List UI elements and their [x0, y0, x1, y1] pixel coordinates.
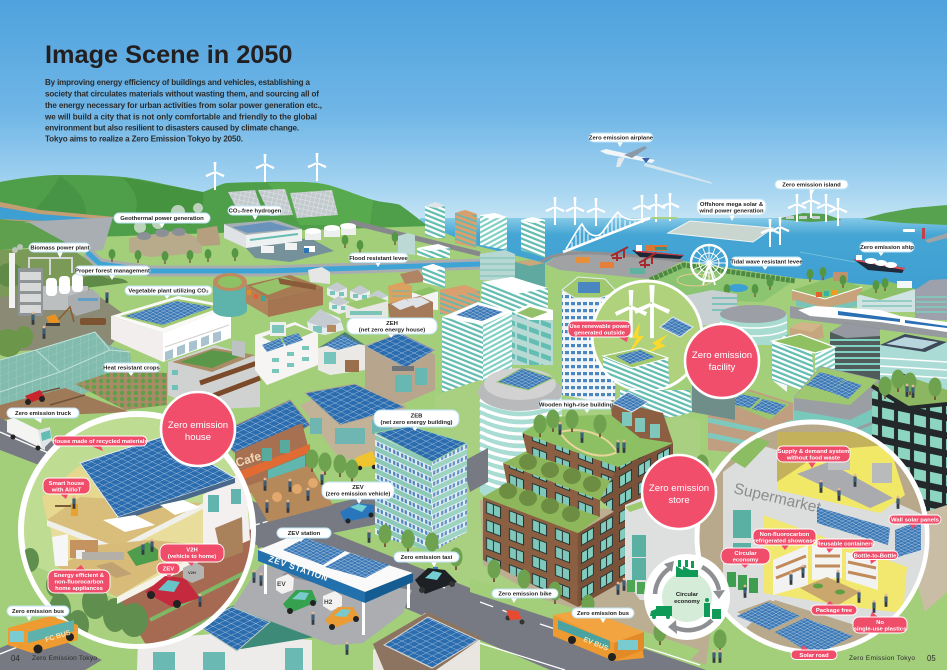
orange car — [325, 607, 360, 630]
label: V2H: (vehicle to home) — [168, 554, 216, 560]
dam and lake — [0, 202, 115, 252]
recycling truck icon — [650, 606, 672, 619]
label: Vegetable plant utilizing CO2: Vegetable plant utilizing CO₂ — [128, 288, 209, 294]
desk and person — [55, 505, 72, 507]
cafe: Cafe — [234, 449, 263, 470]
distant tall buildings — [398, 202, 548, 318]
footer right: Zero Emission Tokyo — [849, 655, 915, 662]
street trees near wooden building — [488, 454, 726, 652]
label: Supply and demand system — [777, 446, 850, 468]
label: Zero emission bike: Zero emission bike — [498, 592, 552, 598]
intro text — [44, 78, 322, 144]
zero emission bike — [506, 610, 524, 624]
label: Energy efficient appliances: non-fluorocarbon — [54, 580, 104, 586]
teal mid building centre right — [692, 370, 735, 420]
label: Solar road: Solar road — [799, 653, 829, 659]
facility building — [602, 348, 670, 390]
label: Offshore mega solar: wind power generation — [698, 208, 764, 214]
offshore island — [777, 213, 842, 222]
label: No single-use plastics: No — [876, 620, 884, 626]
badge: zero emission store: Zero emission — [649, 483, 709, 494]
label: Heat resistant crops: Heat resistant crops — [103, 366, 161, 372]
label: Zero emission ship — [860, 242, 914, 256]
label: Use renewable power generated outside — [568, 321, 631, 342]
land base — [0, 226, 947, 670]
shop shelves — [773, 545, 878, 595]
zero emission truck — [7, 418, 52, 450]
low-rise apartment with rooftop garden — [168, 322, 318, 410]
tan low solar building — [708, 388, 793, 458]
zero emission tall teal building — [442, 302, 512, 412]
label: Bottle-to-Bottle: Bottle-to-Bottle — [854, 554, 897, 560]
forest on left slope — [0, 248, 135, 297]
title: Image Scene in 2050 — [45, 41, 292, 69]
road markings — [0, 432, 700, 670]
ZEB net zero energy building — [375, 426, 467, 552]
label: Flood resistant levee — [349, 253, 409, 267]
label: Smart house with AI/IoT: with AI/IoT — [51, 488, 82, 494]
badge: zero emission house: house — [185, 432, 211, 443]
suspension bridge — [563, 212, 650, 252]
label: Energy efficient appliances: Energy efficient & — [54, 573, 105, 579]
house structure — [203, 475, 250, 544]
label: Use renewable power generated outside: generated outside — [574, 330, 626, 336]
label: CO2-free hydrogen — [228, 206, 282, 220]
label: V2H — [160, 544, 224, 566]
house trees — [21, 548, 148, 640]
label: ZEV red — [157, 563, 180, 578]
V2H charger: V2H — [188, 570, 196, 575]
label: ZEB: (net zero energy building) — [380, 420, 453, 426]
badge: zero emission facility — [685, 324, 759, 398]
label: Heat resistant crops — [103, 363, 161, 376]
greenhouses — [0, 332, 132, 410]
label: Offshore mega solar — [697, 199, 766, 221]
beds — [103, 515, 155, 532]
badge: zero emission facility: Zero emission — [692, 350, 752, 361]
wooden high-rise building — [483, 392, 673, 607]
hexagonal white tower — [562, 277, 617, 400]
label: ZEH — [347, 318, 437, 338]
elevated train line — [790, 306, 947, 338]
facility turbines — [615, 290, 647, 338]
people near station — [252, 570, 349, 655]
sea wind turbines — [546, 190, 848, 226]
label: CO2-free hydrogen: CO₂-free hydrogen — [229, 208, 282, 214]
cafe terrace — [247, 465, 333, 522]
EV charger box: EV — [277, 581, 286, 588]
label: Supply and demand system: without food waste — [786, 456, 841, 462]
waterfront low buildings — [792, 267, 947, 320]
label: Package free — [811, 601, 857, 615]
round solar-roof building — [478, 368, 562, 504]
white green-roof tower — [772, 334, 835, 397]
label: Non-fluorocarbon refrigerated showcase — [753, 529, 816, 550]
shoppers — [789, 565, 888, 613]
factory icon — [676, 560, 698, 577]
trees around ZEB — [306, 450, 462, 570]
label: Zero emission truck — [7, 408, 79, 423]
airplane with contrail — [600, 146, 712, 184]
biomass power plant — [9, 244, 100, 316]
yellow car behind ZEB — [355, 451, 378, 470]
intro text: environment but also resilient to disasters caused by climate change. — [45, 124, 299, 132]
container ship and cranes — [575, 245, 684, 274]
red zero emission car — [145, 576, 200, 608]
facility inset background — [592, 281, 702, 400]
roof solar panels — [80, 436, 235, 517]
label: Reusable containers — [816, 539, 875, 553]
label: Biomass power plant — [29, 243, 90, 258]
label: Tidal wave resistant levee: Tidal wave resistant levee — [730, 260, 803, 266]
offshore mega solar — [668, 217, 790, 247]
label: Wall solar panels — [889, 515, 941, 529]
H2 box — [323, 591, 342, 611]
dining table — [96, 562, 132, 578]
label: Vegetable plant utilizing CO2 — [125, 286, 212, 299]
badge: zero emission store: store — [668, 495, 690, 506]
bottom centre house — [373, 612, 482, 670]
white store side building — [625, 495, 700, 600]
label: Wooden high-rise building — [539, 400, 613, 413]
label: House made of recycled materials: House made of recycled materials — [52, 439, 148, 445]
H2 box: H2 — [324, 599, 333, 606]
zero emission store inset — [697, 422, 935, 656]
intro text: Tokyo aims to realize a Zero Emission Tokyo by 2050. — [45, 134, 243, 144]
label: ZEB: ZEB — [411, 414, 422, 420]
label: Energy efficient appliances: home appliances — [55, 586, 104, 592]
solar farm on hill — [228, 189, 338, 218]
label: Non-fluorocarbon refrigerated showcase: refrigerated showcase — [753, 538, 816, 544]
zero emission house inset — [20, 414, 260, 660]
label: Zero emission airplane — [589, 133, 654, 147]
label: Zero emission island — [775, 180, 848, 194]
excavator and logs — [31, 290, 109, 339]
circular economy text: economy — [674, 599, 701, 605]
ferris wheel — [691, 245, 727, 285]
circular arrows — [655, 567, 719, 630]
label: Zero emission taxi — [394, 552, 459, 567]
seaside park — [647, 263, 795, 302]
label: Zero emission bus right: Zero emission bus — [577, 611, 630, 617]
breakwater — [903, 228, 947, 243]
label: Zero emission bike — [492, 589, 558, 603]
port and harbour — [541, 250, 683, 279]
label: Solar road — [791, 645, 837, 660]
badge: zero emission house: Zero emission — [168, 420, 228, 431]
vegetable plant utilizing CO2 — [111, 296, 231, 362]
roads — [0, 418, 712, 670]
wooden round and long building — [213, 273, 323, 317]
right peninsula — [862, 205, 947, 225]
label: Wall solar panels: Wall solar panels — [891, 518, 940, 524]
viaduct road — [350, 222, 480, 254]
EV bus: EV BUS — [582, 636, 609, 653]
label: Geothermal power generation: Geothermal power generation — [120, 216, 204, 222]
footer left: Zero Emission Tokyo — [32, 655, 97, 662]
glass round base below facility — [620, 390, 692, 418]
person recycling icon — [704, 598, 721, 619]
hydrogen plant — [224, 220, 356, 262]
label: Proper forest management: Proper forest management — [75, 268, 150, 274]
people by recycling bins — [616, 578, 645, 595]
label: ZEV station — [277, 528, 331, 542]
zero energy house — [365, 333, 435, 405]
label: Zero emission bus left — [7, 606, 69, 621]
label: Tidal wave resistant levee — [730, 257, 803, 270]
page number left: 04 — [11, 654, 20, 663]
recycling bins — [727, 572, 758, 593]
dark green-roof building — [872, 370, 947, 520]
label: Proper forest management — [75, 266, 150, 280]
label: Reusable containers: Reusable containers — [816, 542, 875, 548]
wall solar panels — [817, 507, 921, 558]
badge: zero emission facility: facility — [709, 362, 736, 373]
circular economy diagram — [644, 554, 730, 640]
label: Supply and demand system: Supply & demand system — [778, 449, 849, 455]
label: Geothermal power generation — [114, 213, 210, 228]
blue zero emission vehicle — [340, 503, 374, 524]
black zero emission taxi — [415, 567, 457, 594]
label: Energy efficient appliances — [48, 565, 110, 593]
biomass site ground — [0, 286, 132, 352]
small houses district — [307, 267, 480, 335]
intro text: By improving energy efficiency of buildings and vehicles, establishing a — [45, 78, 310, 87]
person charging — [198, 594, 202, 607]
label: Zero emission taxi: Zero emission taxi — [401, 555, 453, 561]
crop fields and tractor — [0, 370, 167, 420]
label: Zero emission bus right — [572, 608, 634, 623]
label: ZEH: (net zero energy house) — [359, 328, 425, 334]
mid buildings behind train — [683, 290, 737, 325]
label: ZEB — [374, 410, 459, 431]
label: Zero emission bus left: Zero emission bus — [12, 609, 65, 615]
small trees along river — [109, 232, 398, 264]
sea — [420, 218, 947, 330]
label: Flood resistant levee: Flood resistant levee — [349, 256, 409, 262]
label: Zero emission truck: Zero emission truck — [15, 411, 72, 417]
geothermal plant — [129, 203, 220, 257]
label: ZEV zero emission vehicle: (zero emission vehicle) — [326, 492, 390, 498]
label: ZEV station: ZEV station — [288, 531, 321, 537]
V2H charger — [183, 562, 204, 583]
ZEV station — [233, 535, 413, 645]
EV bus — [553, 609, 644, 661]
bottom left house — [137, 605, 315, 670]
label: Offshore mega solar: Offshore mega solar & — [700, 202, 764, 208]
upper kitchen room — [777, 432, 905, 513]
EV charger box — [276, 574, 294, 594]
produce table — [800, 577, 860, 607]
label: Circular economy red — [721, 548, 770, 568]
sofa — [127, 542, 158, 566]
fridge and kitchen — [52, 534, 68, 566]
label: V2H: V2H — [186, 548, 198, 554]
label: Package free: Package free — [816, 608, 853, 614]
zero emission ship at sea — [800, 252, 905, 273]
label: ZEV zero emission vehicle — [322, 482, 394, 504]
shop floor — [763, 515, 907, 613]
middle houses — [318, 332, 365, 375]
sidewalk tan around wooden building — [480, 500, 712, 665]
ZEV station: ZEV STATION — [267, 553, 330, 583]
left mountains — [0, 175, 430, 265]
label: No single-use plastics — [853, 612, 907, 633]
label: Zero emission island: Zero emission island — [782, 182, 841, 188]
label: Use renewable power generated outside: Use renewable power — [569, 324, 630, 330]
label: Bottle-to-Bottle — [852, 551, 898, 564]
label: Wooden high-rise building: Wooden high-rise building — [539, 402, 613, 408]
supermarket sign: Supermarket — [732, 480, 823, 517]
FC bus: FC BUS — [45, 630, 72, 644]
label: ZEV zero emission vehicle: ZEV — [352, 485, 364, 491]
label: Biomass power plant: Biomass power plant — [30, 246, 90, 252]
green foreground ground — [430, 380, 700, 600]
left lower forest — [0, 326, 33, 357]
round and mid-rise buildings back right — [720, 305, 947, 390]
river with levees — [87, 252, 480, 271]
windows and door — [208, 495, 219, 512]
green ground patches left and centre — [85, 278, 240, 335]
label: House made of recycled materials — [52, 436, 148, 451]
solar road — [737, 600, 853, 650]
badge: zero emission house — [161, 392, 235, 466]
label: Zero emission airplane: Zero emission airplane — [589, 136, 654, 142]
beige wall right edge — [900, 505, 947, 612]
label: Circular economy red: economy — [733, 558, 759, 564]
label: Zero emission ship: Zero emission ship — [860, 245, 914, 251]
page number right: 05 — [927, 654, 936, 663]
store windows — [733, 510, 751, 548]
label: ZEV red: ZEV — [163, 566, 174, 572]
couple bottom — [712, 650, 722, 663]
facility solar panel — [660, 317, 693, 337]
FC bus — [8, 616, 78, 654]
facility lightning bolts — [631, 322, 668, 352]
label: ZEH: ZEH — [386, 321, 398, 327]
label: Smart house with AI/IoT: Smart house — [49, 481, 85, 487]
intro text: we will build a city that is not only comfortable and friendly to the global — [44, 112, 317, 121]
label: No single-use plastics: single-use plastics — [854, 626, 907, 632]
green car — [283, 590, 317, 614]
label: Non-fluorocarbon refrigerated showcase: Non-fluorocarbon — [760, 532, 810, 538]
circular economy text: Circular — [676, 592, 698, 598]
intro text: the energy necessary for urban activities from solar power generation etc., — [45, 101, 322, 110]
white green-roof block — [512, 304, 553, 365]
label: Smart house with AI/IoT — [43, 478, 90, 499]
cafe — [215, 400, 310, 495]
zero emission house upper: cafe and house — [300, 384, 405, 460]
label: Circular economy red: Circular — [734, 551, 757, 557]
solar roof office — [794, 366, 880, 450]
badge: zero emission store — [642, 455, 716, 529]
intro text: society that circulates materials without wasting them, and sourcing all of — [45, 90, 319, 98]
hill turbines — [206, 153, 326, 190]
sky background — [0, 0, 947, 226]
